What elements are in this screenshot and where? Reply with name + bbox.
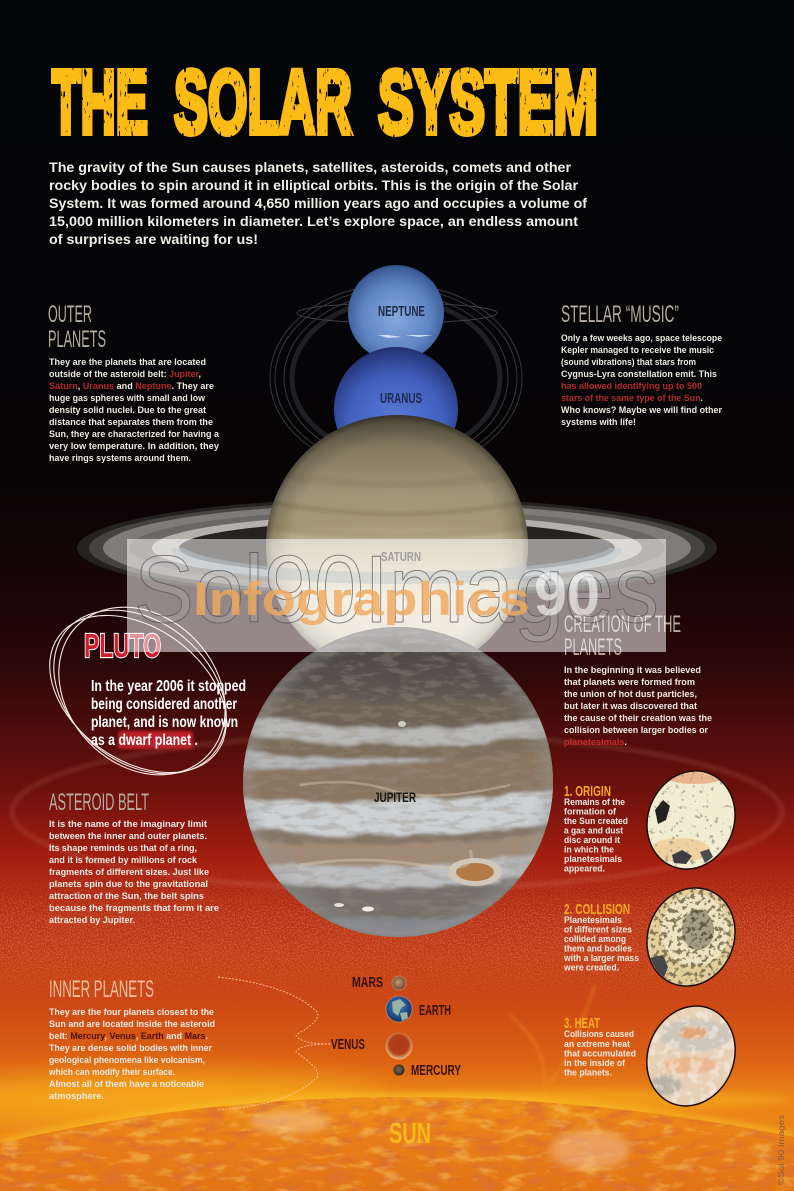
- planet: mercury: MERCURY: [411, 1063, 461, 1079]
- oval 3: heat: [646, 1005, 736, 1107]
- text: asteroid belt: It is the name of the imaginary limit: [49, 819, 207, 829]
- planet: uranus: [334, 347, 458, 471]
- panel: asteroid belt: [49, 789, 219, 925]
- panel: outer planets: [48, 301, 220, 463]
- asteroid belt orbit: [12, 734, 782, 890]
- text: stellar music: has allowed identifying up to 500: [561, 381, 702, 391]
- step 1: origin: [564, 783, 628, 874]
- scribbled circles: [20, 573, 259, 809]
- text: outer planets: very low temperature. In addition, they: [49, 441, 219, 451]
- intro text: System. It was formed around 4,650 million years ago and occupies a volume of: [49, 196, 588, 211]
- intro text: The gravity of the Sun causes planets, satellites, asteroids, comets and other: [49, 160, 572, 175]
- text: pluto: In the year 2006 it stopped: [91, 678, 246, 695]
- text: stellar music: systems with life!: [561, 417, 636, 427]
- heading: inner planets: INNER PLANETS: [49, 976, 154, 1003]
- planet: venus: VENUS: [331, 1037, 365, 1053]
- text: asteroid belt: attracted by Jupiter.: [49, 915, 135, 925]
- step 1: origin: in which the: [564, 844, 614, 854]
- credit: ©Sol 90 Images: [777, 1115, 786, 1185]
- heading: outer planets: OUTER: [48, 301, 92, 328]
- text: inner planets: geological phenomena like volcanism,: [49, 1055, 205, 1065]
- pluto callout: [20, 573, 259, 809]
- text: stellar music: Only a few weeks ago, space telescope: [561, 333, 722, 343]
- planet: uranus: URANUS: [380, 390, 422, 407]
- text: outer planets: [49, 357, 220, 463]
- text: stellar music: Who knows? Maybe we will find other: [561, 405, 722, 415]
- heading: stellar music: STELLAR “MUSIC”: [561, 301, 679, 328]
- step 1: origin: a gas and dust: [564, 826, 623, 836]
- heading: outer planets: PLANETS: [48, 326, 106, 353]
- planet: neptune: NEPTUNE: [378, 303, 425, 320]
- text: inner planets: belt: Mercury, Venus, Earth and Mars.: [49, 1031, 208, 1041]
- title: [51, 53, 598, 153]
- watermark: Sol90Images: [134, 536, 659, 643]
- text: stellar music: Cygnus-Lyra constellation emit. This: [561, 369, 717, 379]
- text: outer planets: They are the planets that are located: [49, 357, 206, 367]
- text: outer planets: Saturn, Uranus and Neptune. They are: [49, 381, 214, 391]
- heading: outer planets: [48, 301, 106, 353]
- text: outer planets: have rings systems around them.: [49, 453, 191, 463]
- step 2: collision: were created.: [563, 962, 619, 972]
- title: SOLAR: [174, 53, 352, 153]
- text: asteroid belt: because the fragments that form it are: [49, 903, 219, 913]
- text: creation: [564, 665, 712, 747]
- oval 1: origin: [646, 770, 736, 870]
- step 3: heat: 3. HEAT: [564, 1015, 600, 1032]
- step 1: origin: formation of: [564, 806, 617, 816]
- text: creation: planetesimals.: [564, 737, 627, 747]
- planet: venus: [331, 1032, 412, 1060]
- planet: neptune: [348, 265, 444, 361]
- text: asteroid belt: Its shape reminds us that of a ring,: [49, 843, 197, 853]
- oval 2: collision: [646, 887, 736, 987]
- text: inner planets: They are the four planets closest to the: [49, 1007, 214, 1017]
- text: pluto: [91, 678, 246, 749]
- intro text: rocky bodies to spin around it in elliptical orbits. This is the origin of the Solar: [49, 178, 579, 193]
- step 2: collision: Planetesimals: [564, 915, 622, 925]
- planet: mars: MARS: [352, 975, 383, 991]
- text: stellar music: stars of the same type of the Sun.: [561, 393, 703, 403]
- step 2: collision: [563, 901, 639, 972]
- dotted curve to venus: [218, 977, 331, 1110]
- step 3: heat: the planets.: [564, 1068, 612, 1078]
- pluto highlight: [118, 731, 193, 749]
- step 3: heat: [564, 1015, 636, 1078]
- text: stellar music: [561, 333, 722, 427]
- text: asteroid belt: and it is formed by millions of rock: [49, 855, 198, 865]
- sun surface: [0, 1095, 794, 1191]
- text: inner planets: which can modify their surface.: [48, 1067, 175, 1077]
- text: stellar music: Kepler managed to receive the music: [561, 345, 714, 355]
- step 1: origin: appeared.: [564, 864, 605, 874]
- text: outer planets: density solid nuclei. Due to the great: [49, 405, 206, 415]
- panel: creation of the planets: [564, 615, 736, 1107]
- step 1: origin: the Sun created: [564, 816, 628, 826]
- planet: saturn: SATURN: [381, 549, 421, 564]
- heading: asteroid belt: ASTEROID BELT: [49, 789, 149, 816]
- text: outer planets: Sun, they are characterized for having a: [49, 429, 220, 439]
- text: pluto: being considered another: [91, 696, 237, 713]
- step 2: collision: of different sizes: [564, 924, 632, 934]
- text: inner planets: Sun and are located inside the asteroid: [49, 1019, 215, 1029]
- step 2: collision: collided among: [564, 934, 626, 944]
- intro text: of surprises are waiting for us!: [49, 232, 258, 247]
- step 1: origin: 1. ORIGIN: [564, 783, 611, 800]
- step 1: origin: Remains of the: [564, 797, 625, 807]
- text: creation: that planets were formed from: [564, 677, 695, 687]
- text: outer planets: huge gas spheres with small and low: [49, 393, 206, 403]
- text: outer planets: outside of the asteroid belt: Jupiter,: [49, 369, 201, 379]
- text: asteroid belt: between the inner and outer planets.: [49, 831, 207, 841]
- planet: earth: [386, 996, 451, 1022]
- heading: pluto: PLUTO: [84, 627, 161, 664]
- step 3: heat: Collisions caused: [564, 1029, 634, 1039]
- text: asteroid belt: attraction of the Sun, the belt spins: [49, 891, 204, 901]
- planet: jupiter: [243, 627, 553, 937]
- heading: creation: PLANETS: [564, 634, 622, 661]
- planet: saturn: [178, 415, 616, 677]
- step 3: heat: an extreme heat: [564, 1039, 630, 1049]
- saturn rings: [77, 498, 717, 598]
- step 3: heat: in the inside of: [564, 1058, 626, 1068]
- step 2: collision: with a larger mass: [563, 953, 639, 963]
- step 1: origin: planetesimals: [564, 854, 622, 864]
- text: pluto: as a dwarf planet .: [91, 732, 198, 749]
- text: asteroid belt: fragments of different sizes. Just like: [49, 867, 209, 877]
- intro text: [49, 160, 588, 247]
- step 2: collision: 2. COLLISION: [564, 901, 630, 918]
- neptune rings: [297, 303, 497, 323]
- step 1: origin: disc around it: [564, 835, 620, 845]
- inner planets diagram: [218, 975, 461, 1110]
- text: stellar music: (sound vibrations) that stars from: [561, 357, 696, 367]
- text: inner planets: Almost all of them have a noticeable: [49, 1079, 204, 1089]
- text: pluto: planet, and is now known: [91, 714, 238, 731]
- text: creation: In the beginning it was believed: [564, 665, 701, 675]
- step 2: collision: them and bodies: [564, 944, 632, 954]
- planet: mercury: [394, 1063, 461, 1079]
- text: inner planets: [48, 1007, 215, 1101]
- text: asteroid belt: planets spin due to the gravitational: [49, 879, 208, 889]
- panel: stellar music: [561, 301, 722, 427]
- text: creation: collision between larger bodies or: [564, 725, 708, 735]
- text: creation: the union of hot dust particles,: [564, 689, 697, 699]
- heading: creation: CREATION OF THE: [564, 611, 681, 638]
- text: asteroid belt: [49, 819, 219, 925]
- text: creation: the cause of their creation was the: [564, 713, 712, 723]
- title: THE: [51, 53, 148, 153]
- planet: earth: EARTH: [419, 1003, 451, 1019]
- watermark: Infographics: [193, 572, 530, 625]
- sun label: SUN: [389, 1118, 431, 1150]
- intro text: 15,000 million kilometers in diameter. Let’s explore space, an endless amount: [49, 214, 579, 229]
- text: outer planets: distance that separates them from the: [49, 417, 213, 427]
- step 3: heat: that accumulated: [564, 1048, 636, 1058]
- text: inner planets: They are dense solid bodies with inner: [49, 1043, 212, 1053]
- watermark: 90: [534, 561, 600, 628]
- sun glow: [0, 860, 794, 1126]
- panel: inner planets: [48, 976, 215, 1101]
- title: SYSTEM: [378, 53, 598, 153]
- planet: jupiter: JUPITER: [374, 789, 416, 805]
- uranus rings: [270, 284, 522, 472]
- text: creation: but later it was discovered that: [564, 701, 697, 711]
- text: inner planets: atmosphere.: [49, 1091, 104, 1101]
- heading: creation: [564, 611, 681, 661]
